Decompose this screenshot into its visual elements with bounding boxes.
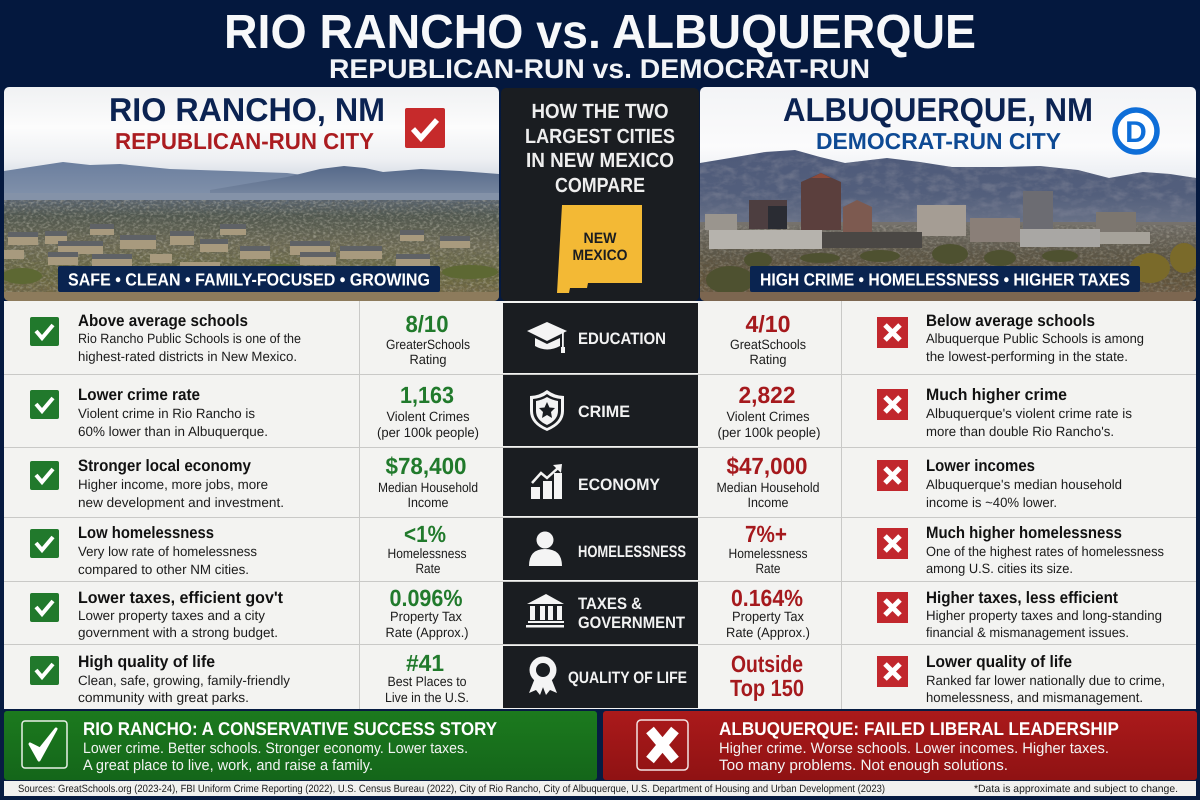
heading: failed liberal leadership: ALBUQUERQUE: FAILED LIBERAL LEADERSHIP bbox=[719, 718, 1119, 739]
category: crime bbox=[503, 375, 698, 446]
text: high quality of life: community with great parks. bbox=[78, 690, 249, 705]
text: lower quality of life: homelessness, and mismanagement. bbox=[926, 690, 1143, 705]
text: above average schools bbox=[78, 312, 301, 364]
icon: red X bbox=[877, 460, 908, 491]
stat: 7%+ bbox=[728, 521, 808, 576]
stat: 0.164% property tax: 0.164% bbox=[731, 585, 803, 611]
stat: 0.096% property tax: Rate (Approx.) bbox=[386, 625, 468, 640]
text: below average schools bbox=[926, 312, 1144, 364]
text: lower quality of life: Ranked far lower nationally due to crime, bbox=[926, 673, 1165, 688]
subheading: Democrat-run city: DEMOCRAT-RUN CITY bbox=[816, 128, 1061, 154]
stat: under 1 percent bbox=[388, 521, 467, 576]
text: lower crime rate: Lower crime rate bbox=[78, 386, 200, 404]
panel: Albuquerque header bbox=[700, 87, 1198, 301]
icon: award ribbon bbox=[529, 656, 557, 695]
row: Albuquerque taxes bbox=[726, 585, 1162, 640]
stat: under 1 percent: Homelessness bbox=[388, 546, 467, 561]
text: much higher crime: more than double Rio Rancho's. bbox=[926, 424, 1114, 439]
text: lower quality of life: Lower quality of life bbox=[926, 653, 1072, 671]
stat: 1,163 violent crimes: Violent Crimes bbox=[386, 409, 470, 424]
icon: blue D circle bbox=[1115, 110, 1157, 152]
icon: green check bbox=[30, 593, 59, 622]
icon: green check bbox=[30, 390, 59, 419]
stat: $47,000 income bbox=[716, 453, 820, 510]
label: taxes and government: TAXES & bbox=[578, 595, 642, 613]
stat: $47,000 income: Income bbox=[748, 495, 788, 510]
text: low homelessness bbox=[78, 524, 257, 577]
label: crime: CRIME bbox=[578, 403, 630, 421]
stat: 0.096% property tax: Property Tax bbox=[390, 609, 462, 624]
title: RIO RANCHO vs. ALBUQUERQUE bbox=[224, 6, 976, 59]
heading: conservative success story: RIO RANCHO: A CONSERVATIVE SUCCESS STORY bbox=[83, 718, 498, 739]
text: high quality of life: High quality of life bbox=[78, 653, 215, 671]
row: Rio Rancho economy bbox=[30, 453, 478, 510]
stat: $47,000 income: $47,000 bbox=[726, 453, 808, 479]
stat: 0.164% property tax: Property Tax bbox=[732, 609, 804, 624]
text: lower incomes: Albuquerque's median household bbox=[926, 477, 1122, 492]
text: lower incomes bbox=[926, 457, 1122, 510]
text: lower crime rate: 60% lower than in Albuquerque. bbox=[78, 424, 268, 439]
icon: green check bbox=[30, 461, 59, 490]
text: summary lines: Lower crime. Better schools. Stronger economy. Lower taxes. bbox=[83, 740, 468, 757]
stat: 2,822 violent crimes: 2,822 bbox=[738, 382, 796, 408]
text: lower quality of life bbox=[926, 653, 1165, 705]
stat: under 1 percent: Rate bbox=[416, 561, 440, 576]
stat: 7%+: Rate bbox=[756, 561, 780, 576]
icon: red X bbox=[877, 528, 908, 559]
row: Albuquerque crime bbox=[718, 382, 1132, 440]
icon: red X bbox=[877, 389, 908, 420]
icon: New Mexico state shape bbox=[557, 205, 642, 293]
stat: 0.164% property tax: Rate (Approx.) bbox=[726, 625, 810, 640]
text: how the two largest cities compare: HOW THE TWO bbox=[532, 100, 669, 123]
text: stronger local economy: Stronger local economy bbox=[78, 457, 252, 475]
text: lower incomes: income is ~40% lower. bbox=[926, 495, 1057, 510]
icon: green check bbox=[30, 317, 59, 346]
label: taxes and government bbox=[578, 595, 685, 632]
text: much higher homelessness: One of the highest rates of homelessness bbox=[926, 544, 1164, 559]
text: how the two largest cities compare: LARGEST CITIES bbox=[525, 125, 675, 148]
stat: 2,822 violent crimes: Violent Crimes bbox=[726, 409, 810, 424]
text: stronger local economy: new development and investment. bbox=[78, 495, 284, 510]
text: lower crime rate bbox=[78, 386, 268, 439]
label: quality of life: QUALITY OF LIFE bbox=[568, 669, 687, 687]
stat: 1,163 violent crimes: (per 100k people) bbox=[377, 425, 479, 440]
text: below average schools: Albuquerque Public Schools is among bbox=[926, 331, 1144, 346]
banner: high crime homelessness higher taxes: HIGH CRIME • HOMELESSNESS • HIGHER TAXES bbox=[760, 270, 1130, 290]
icon: person bbox=[529, 532, 562, 566]
category: quality of life bbox=[503, 646, 698, 708]
stat: 8/10 rating: Rating bbox=[410, 352, 446, 367]
text: above average schools: Rio Rancho Public Schools is one of the bbox=[78, 331, 301, 346]
stat: $78,400 income: Income bbox=[408, 495, 448, 510]
footer: sources bbox=[4, 781, 1196, 796]
row: Rio Rancho taxes bbox=[30, 585, 468, 640]
stat: outside top 150: Top 150 bbox=[730, 675, 804, 701]
text: higher taxes, less efficient: Higher taxes, less efficient bbox=[926, 589, 1118, 607]
text: below average schools: Below average schools bbox=[926, 312, 1095, 330]
row: Albuquerque quality of life bbox=[730, 651, 1165, 705]
stat: 1,163 violent crimes: 1,163 bbox=[400, 382, 454, 408]
text: summary lines: Too many problems. Not enough solutions. bbox=[719, 757, 1008, 774]
text: stronger local economy: Higher income, more jobs, more bbox=[78, 477, 268, 492]
photo: Rio Rancho mountains and houses bbox=[2, 162, 499, 301]
text: much higher homelessness bbox=[926, 524, 1164, 576]
text: much higher crime: Albuquerque's violent crime rate is bbox=[926, 406, 1132, 421]
text: low homelessness: Low homelessness bbox=[78, 524, 214, 542]
stat: 4/10 rating: GreatSchools bbox=[730, 337, 806, 352]
stat: 0.096% property tax: 0.096% bbox=[390, 585, 463, 611]
category: homelessness bbox=[503, 518, 698, 580]
stat: under 1 percent: <1% bbox=[404, 521, 446, 547]
text: lower incomes: Lower incomes bbox=[926, 457, 1035, 475]
row: Rio Rancho crime bbox=[30, 382, 479, 440]
stat: outside top 150: Outside bbox=[731, 651, 803, 677]
text: above average schools: highest-rated districts in New Mexico. bbox=[78, 349, 297, 364]
text: much higher crime: Much higher crime bbox=[926, 386, 1067, 404]
footer: sources: *Data is approximate and subject to change. bbox=[974, 783, 1178, 795]
stat: 7%+: 7%+ bbox=[745, 521, 787, 547]
text: much higher crime bbox=[926, 386, 1132, 439]
text: lower crime rate: Violent crime in Rio Rancho is bbox=[78, 406, 255, 421]
row: Rio Rancho homelessness bbox=[30, 521, 467, 577]
category: taxes and government bbox=[503, 582, 698, 644]
text: higher taxes, less efficient bbox=[926, 589, 1162, 640]
icon: green check bbox=[30, 529, 59, 558]
stat: 2,822 violent crimes: (per 100k people) bbox=[718, 425, 820, 440]
stat: $78,400 income: $78,400 bbox=[386, 453, 466, 479]
banner: safe clean family-focused growing: SAFE • CLEAN • FAMILY-FOCUSED • GROWING bbox=[68, 270, 430, 290]
text: how the two largest cities compare bbox=[525, 100, 675, 197]
text: high quality of life: Clean, safe, growing, family-friendly bbox=[78, 673, 290, 688]
stat: #41 best places bbox=[385, 650, 469, 705]
stat: 4/10 rating: 4/10 bbox=[746, 311, 790, 337]
stat: 0.164% property tax bbox=[726, 585, 810, 640]
text: low homelessness: compared to other NM cities. bbox=[78, 562, 249, 577]
text: above average schools: Above average schools bbox=[78, 312, 248, 330]
icon: New Mexico state shape: MEXICO bbox=[572, 247, 628, 264]
comparison table background bbox=[4, 301, 1196, 709]
icon: blue D circle: D bbox=[1125, 116, 1147, 149]
stat: $78,400 income: Median Household bbox=[378, 480, 478, 495]
label: taxes and government: GOVERNMENT bbox=[578, 614, 685, 632]
text: how the two largest cities compare: IN NEW MEXICO bbox=[526, 149, 674, 172]
text: how the two largest cities compare: COMPARE bbox=[555, 174, 645, 197]
text: below average schools: the lowest-performing in the state. bbox=[926, 349, 1128, 364]
panel: Albuquerque summary bbox=[603, 711, 1197, 780]
text: much higher homelessness: Much higher homelessness bbox=[926, 524, 1122, 542]
text: stronger local economy bbox=[78, 457, 284, 510]
heading: Rio Rancho, NM: RIO RANCHO, NM bbox=[109, 91, 385, 128]
subheading: Republican-run city: REPUBLICAN-RUN CITY bbox=[115, 128, 374, 154]
text: low homelessness: Very low rate of homelessness bbox=[78, 544, 257, 559]
category: economy bbox=[503, 448, 698, 516]
icon: red X bbox=[877, 592, 908, 623]
stat: 2,822 violent crimes bbox=[718, 382, 820, 440]
row: Albuquerque education bbox=[730, 311, 1144, 367]
stat: #41 best places: Live in the U.S. bbox=[385, 690, 469, 705]
text: summary lines: Higher crime. Worse schools. Lower incomes. Higher taxes. bbox=[719, 740, 1109, 757]
icon: New Mexico state shape: NEW bbox=[584, 230, 617, 247]
row: Albuquerque homelessness bbox=[728, 521, 1164, 576]
stat: 4/10 rating bbox=[730, 311, 806, 367]
stat: outside top 150 bbox=[730, 651, 804, 701]
text: lower taxes, efficient gov't bbox=[78, 589, 283, 640]
heading: Albuquerque, NM: ALBUQUERQUE, NM bbox=[783, 91, 1093, 128]
subtitle: REPUBLICAN-RUN vs. DEMOCRAT-RUN bbox=[329, 54, 870, 84]
label: education: EDUCATION bbox=[578, 330, 666, 348]
text: summary lines: A great place to live, work, and raise a family. bbox=[83, 757, 373, 774]
text: lower taxes, efficient gov't: government with a strong budget. bbox=[78, 625, 278, 640]
stat: 1,163 violent crimes bbox=[377, 382, 479, 440]
stat: 4/10 rating: Rating bbox=[750, 352, 786, 367]
stat: $47,000 income: Median Household bbox=[716, 480, 820, 495]
text: summary lines bbox=[719, 740, 1109, 774]
text: high quality of life bbox=[78, 653, 290, 705]
text: summary lines bbox=[83, 740, 468, 774]
label: homelessness: HOMELESSNESS bbox=[578, 543, 686, 561]
text: much higher homelessness: among U.S. cities its size. bbox=[926, 561, 1073, 576]
stat: 8/10 rating: 8/10 bbox=[406, 311, 448, 337]
label: economy: ECONOMY bbox=[578, 476, 660, 494]
icon: government building bbox=[526, 594, 564, 628]
stat: $78,400 income bbox=[378, 453, 478, 510]
icon: red X bbox=[877, 317, 908, 348]
stat: 7%+: Homelessness bbox=[728, 546, 808, 561]
panel: Rio Rancho header bbox=[2, 87, 499, 301]
stat: 8/10 rating: GreaterSchools bbox=[386, 337, 470, 352]
icon: white check outline bbox=[22, 721, 67, 768]
icon: white X outline bbox=[637, 720, 688, 770]
text: higher taxes, less efficient: financial & mismanagement issues. bbox=[926, 625, 1129, 640]
text: lower taxes, efficient gov't: Lower taxes, efficient gov't bbox=[78, 589, 283, 607]
stat: 8/10 rating bbox=[386, 311, 470, 367]
stat: #41 best places: Best Places to bbox=[388, 674, 466, 689]
row: Albuquerque economy bbox=[716, 453, 1122, 510]
icon: graduation cap bbox=[527, 322, 567, 353]
icon: red X bbox=[877, 656, 908, 687]
icon: shield with star bbox=[530, 390, 564, 431]
row: Rio Rancho education bbox=[30, 311, 470, 367]
icon: green check bbox=[30, 656, 59, 685]
stat: #41 best places: #41 bbox=[406, 650, 444, 676]
stat: 0.096% property tax bbox=[386, 585, 468, 640]
photo: Albuquerque mountains and skyline bbox=[700, 150, 1198, 301]
icon: bar chart with arrow bbox=[531, 464, 562, 499]
category: education bbox=[503, 303, 698, 373]
text: higher taxes, less efficient: Higher property taxes and long-standing bbox=[926, 608, 1162, 623]
panel: Rio Rancho summary bbox=[4, 711, 597, 780]
footer: sources: Sources: GreatSchools.org (2023-24), FBI Uniform Crime Reporting (2022), U.S. Census Bureau (2022), City of Rio Rancho, City of Albuquerque, U.S. Department of Housing and Urban Development (2023) bbox=[18, 783, 885, 795]
row: Rio Rancho quality of life bbox=[30, 650, 469, 705]
panel: center intro bbox=[501, 88, 699, 301]
text: lower taxes, efficient gov't: Lower property taxes and a city bbox=[78, 608, 265, 623]
icon: red check box bbox=[405, 108, 445, 148]
